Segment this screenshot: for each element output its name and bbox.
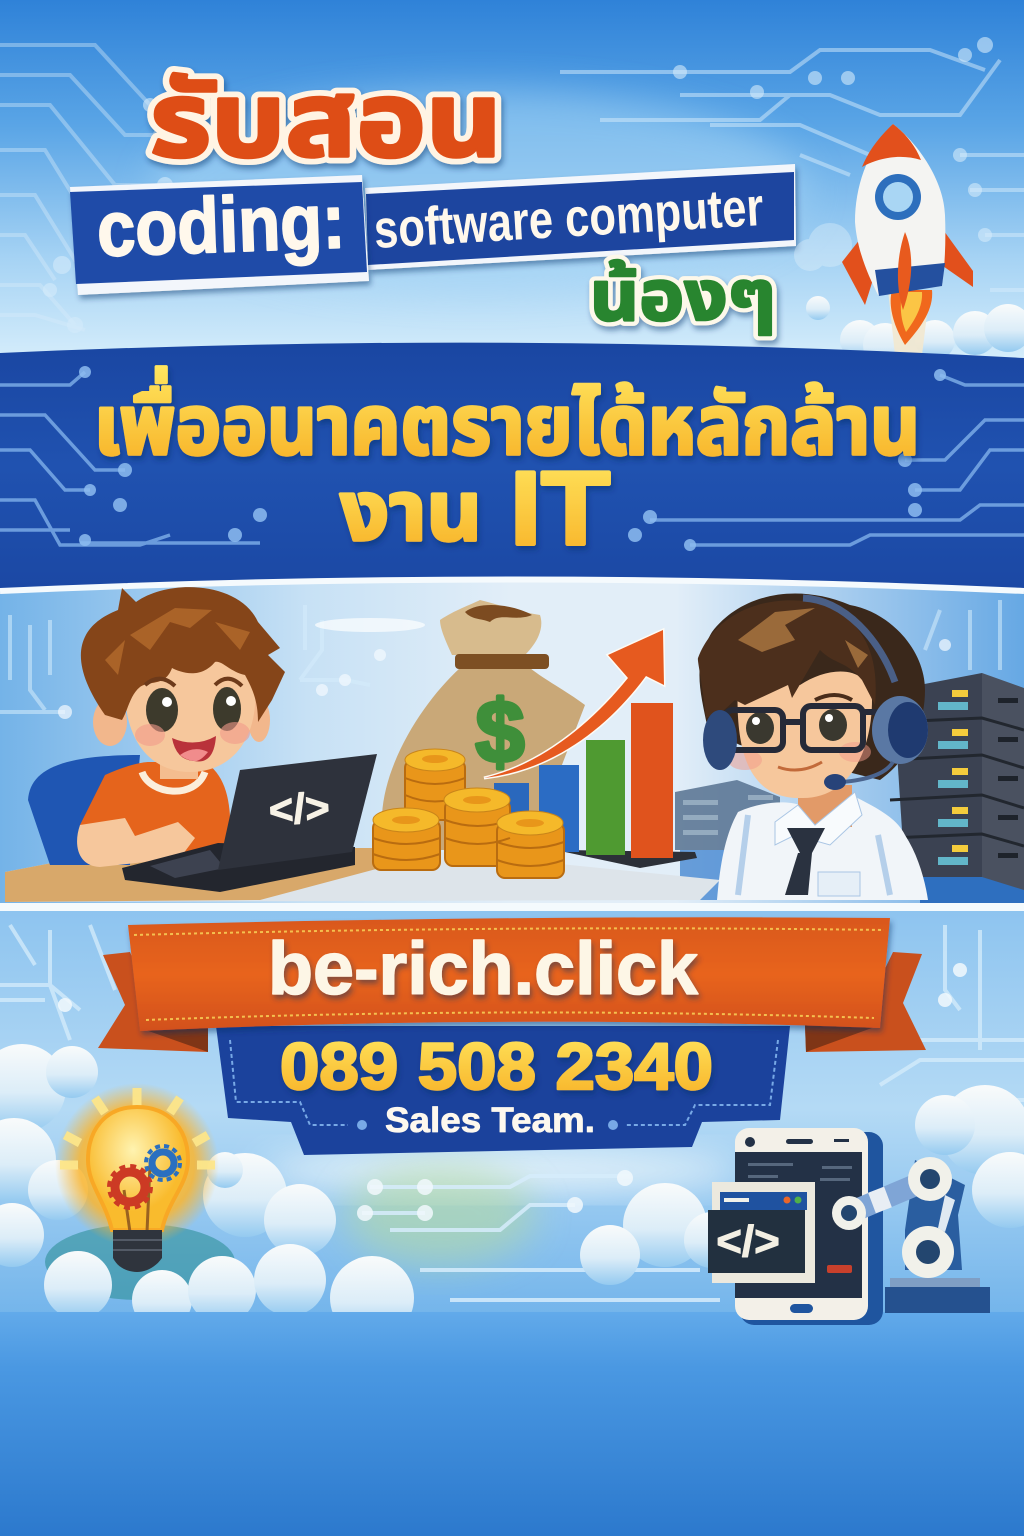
lower background	[0, 903, 1024, 1313]
illustration: laptop	[122, 754, 377, 892]
orange ribbon	[128, 917, 890, 1031]
banner: coding: software computer	[372, 177, 765, 260]
label: น้องๆ: น้องๆ	[590, 257, 776, 335]
website: be-rich.click: be-rich.click	[268, 927, 699, 1010]
icon: phone, code window and robot arm: </>	[716, 1217, 780, 1266]
ribbon tails	[98, 952, 926, 1052]
title: รับสอน: รับสอน	[150, 63, 502, 179]
clouds near rocket	[794, 223, 1024, 367]
illustration: support boy with headset	[698, 594, 928, 900]
headline: เพื่ออนาคตรายได้หลักล้าน: เพื่ออนาคตรายได้หลักล้าน	[94, 366, 920, 472]
illustration scene panel	[0, 580, 1024, 905]
footer blue area	[0, 1312, 1024, 1536]
clouds left	[0, 1044, 414, 1340]
illustration: money bag: $	[476, 682, 524, 781]
label: น้องๆ: น้องๆ	[590, 257, 776, 335]
phone number: 089 508 2340	[280, 1029, 713, 1103]
headline: งาน IT	[340, 451, 610, 567]
contact plaque	[216, 1026, 790, 1155]
icon: rocket	[842, 124, 973, 355]
icon: phone, code window and robot arm	[708, 1128, 990, 1325]
title: รับสอน: รับสอน	[150, 63, 502, 179]
banner: coding: coding:	[96, 176, 346, 273]
headline: งาน IT: งาน	[340, 464, 482, 558]
illustration: laptop: </>	[268, 783, 331, 834]
blue headline band	[0, 343, 1024, 590]
banner: coding	[70, 164, 796, 295]
server racks	[675, 673, 1024, 890]
icon: lightbulb with gears	[55, 1083, 219, 1272]
table	[5, 848, 720, 902]
circuit traces: top	[0, 37, 1024, 333]
illustration: money bag	[382, 600, 585, 850]
coin stacks	[373, 749, 564, 878]
illustration: boy with laptop	[28, 587, 285, 867]
sales team label: Sales Team.	[385, 1101, 595, 1140]
headline: งาน IT: IT	[510, 451, 610, 567]
bar chart with rising arrow	[484, 630, 697, 868]
sky background	[0, 0, 1024, 360]
clouds right	[580, 1085, 1024, 1285]
